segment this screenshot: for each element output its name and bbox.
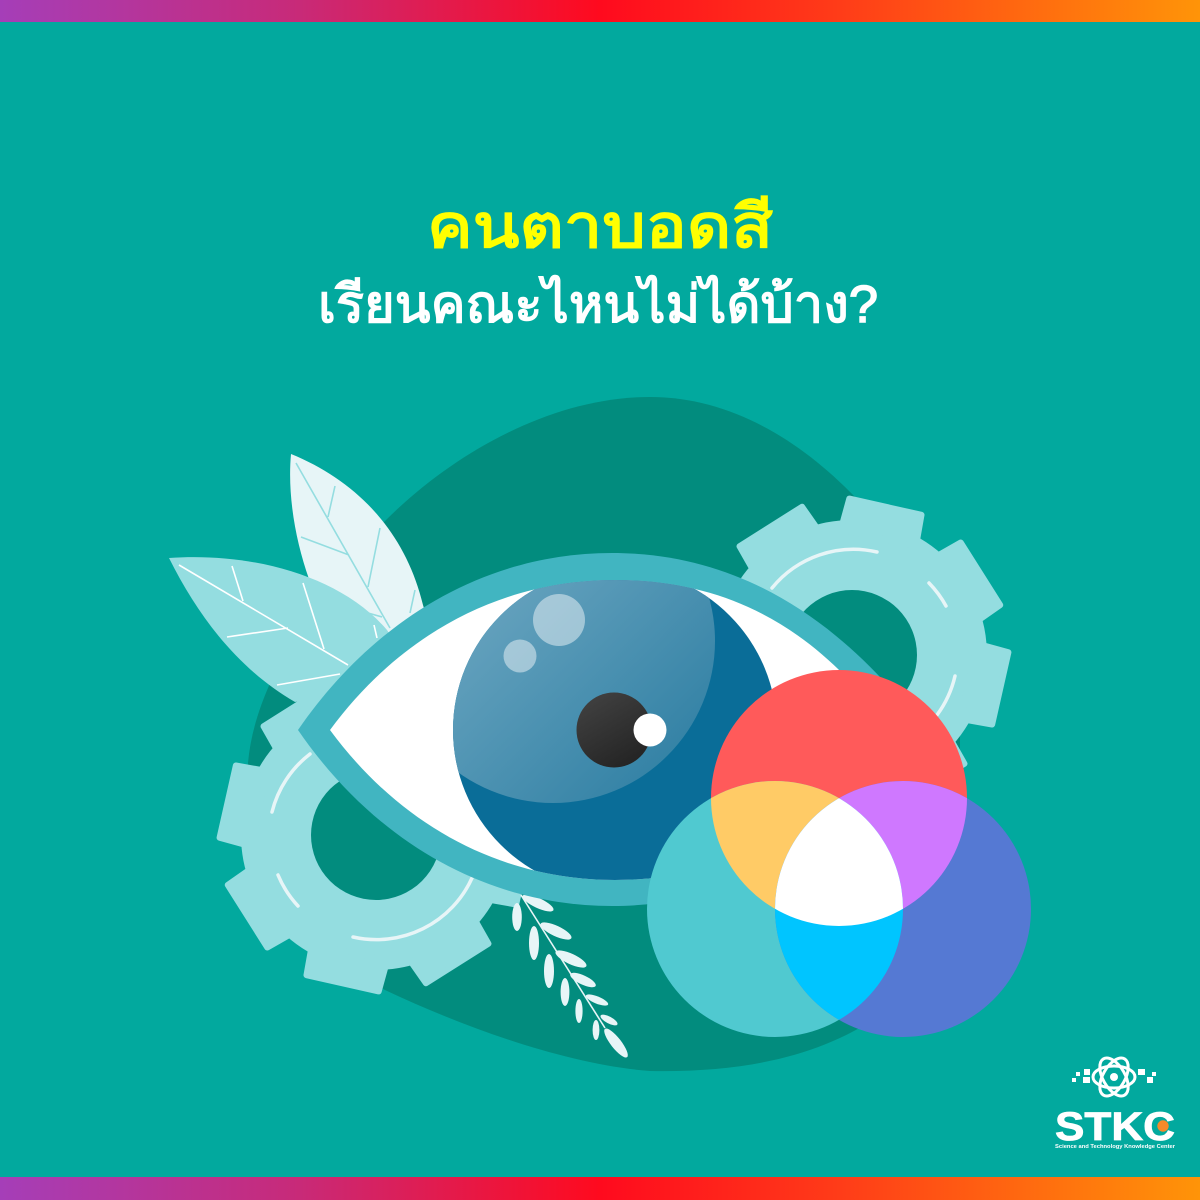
logo: STKC [1055, 1053, 1176, 1150]
gear: right [695, 498, 1009, 812]
logo wordmark: STKC [1055, 1105, 1175, 1149]
logo tagline: Science and Technology Knowledge Center [1055, 1144, 1176, 1150]
dark green background blob [248, 397, 960, 1071]
eye white [330, 580, 890, 880]
colour mixing venn diagram [647, 670, 1031, 1037]
logo atom icon [1072, 1053, 1156, 1101]
pupil [576, 692, 652, 768]
leaf: pale back leaf [290, 454, 440, 660]
twig with small leaves [512, 891, 631, 1060]
leaf: teal front leaf [169, 557, 420, 702]
eye outline [298, 553, 925, 906]
top gradient bar [0, 0, 1200, 22]
subtitle: เรียนคณะไหนไม่ได้บ้าง? [318, 275, 878, 334]
pupil highlight [634, 714, 666, 746]
gear: left [219, 678, 533, 992]
title: คนตาบอดสี [427, 193, 773, 260]
bottom gradient bar [0, 1177, 1200, 1200]
logo orange dot [1157, 1120, 1169, 1132]
eye [298, 553, 880, 906]
iris [453, 580, 772, 880]
